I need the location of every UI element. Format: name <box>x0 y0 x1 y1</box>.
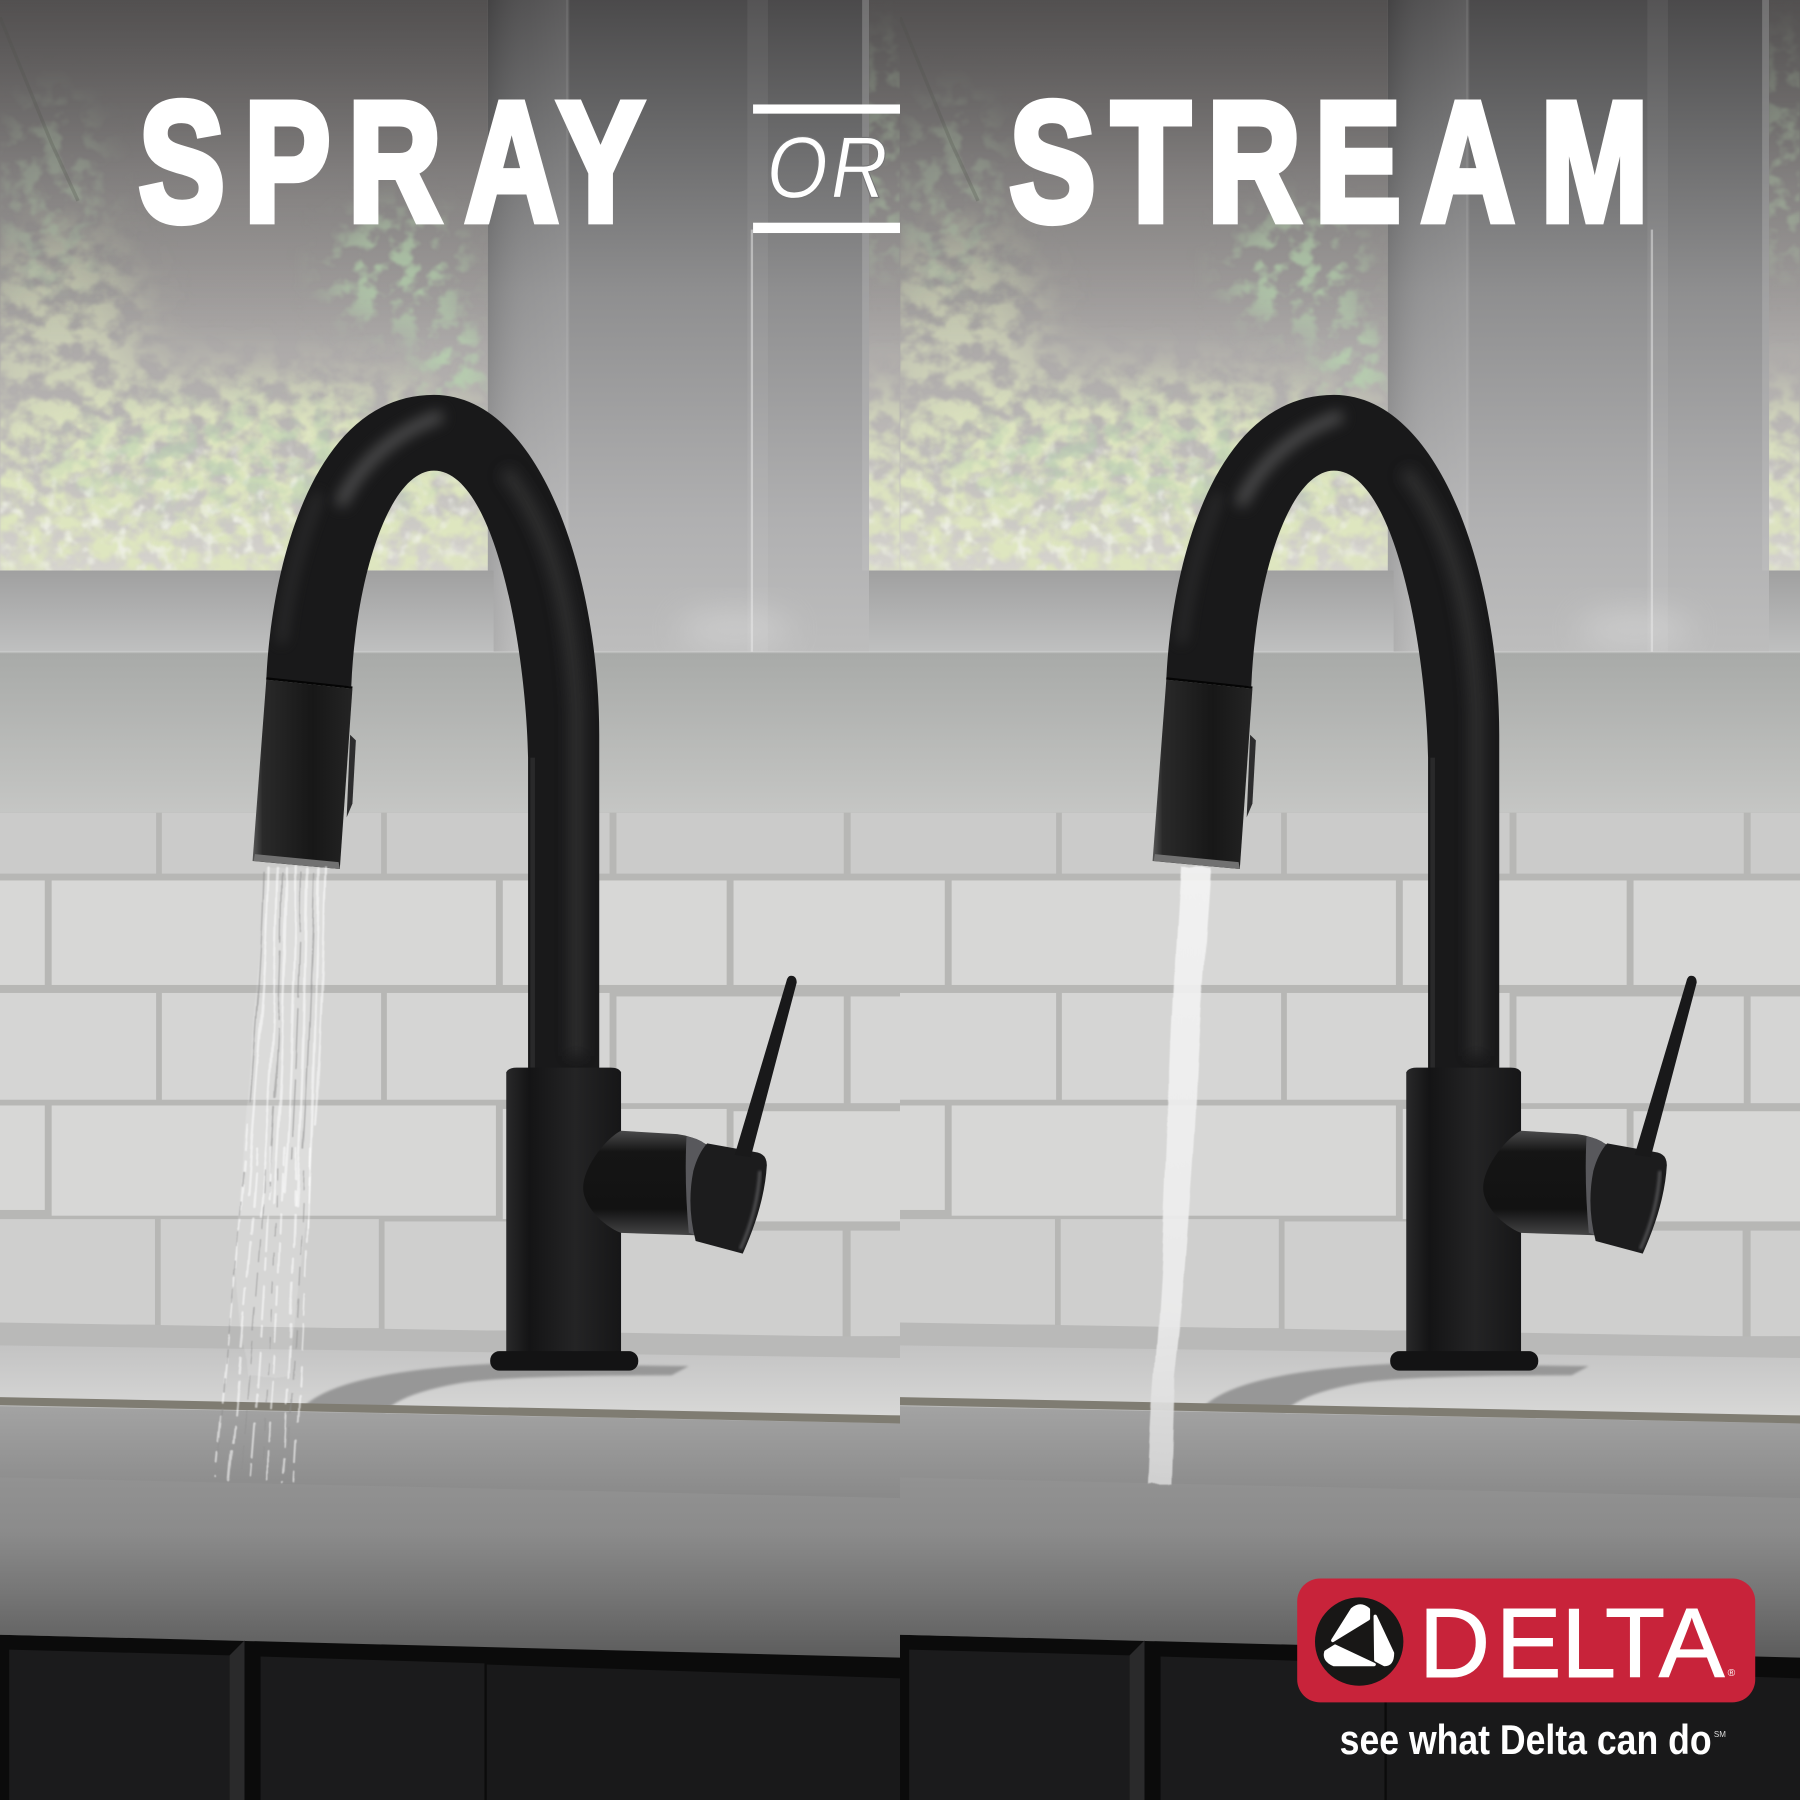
logo: Delta <box>1297 1578 1755 1702</box>
heading: or: OR <box>767 119 891 216</box>
heading: or <box>753 104 900 233</box>
faucet: spray <box>253 395 797 1371</box>
kitchen background: stream <box>820 0 1800 1800</box>
panel: stream <box>820 0 1800 1800</box>
water spray <box>216 868 327 1481</box>
registered mark: ® <box>1728 1668 1736 1679</box>
heading: stream: STREAM <box>1009 66 1648 256</box>
wordmark: DELTA <box>1419 1588 1725 1698</box>
faucet: stream <box>1153 395 1697 1371</box>
water stream <box>1148 867 1211 1483</box>
kitchen background: spray <box>0 0 930 1800</box>
service mark: SM <box>1714 1730 1726 1739</box>
icon: Delta emblem <box>1315 1597 1403 1686</box>
tagline: see what Delta can do <box>1340 1717 1712 1763</box>
heading: spray: SPRAY <box>139 66 644 256</box>
panel: spray <box>0 0 930 1800</box>
